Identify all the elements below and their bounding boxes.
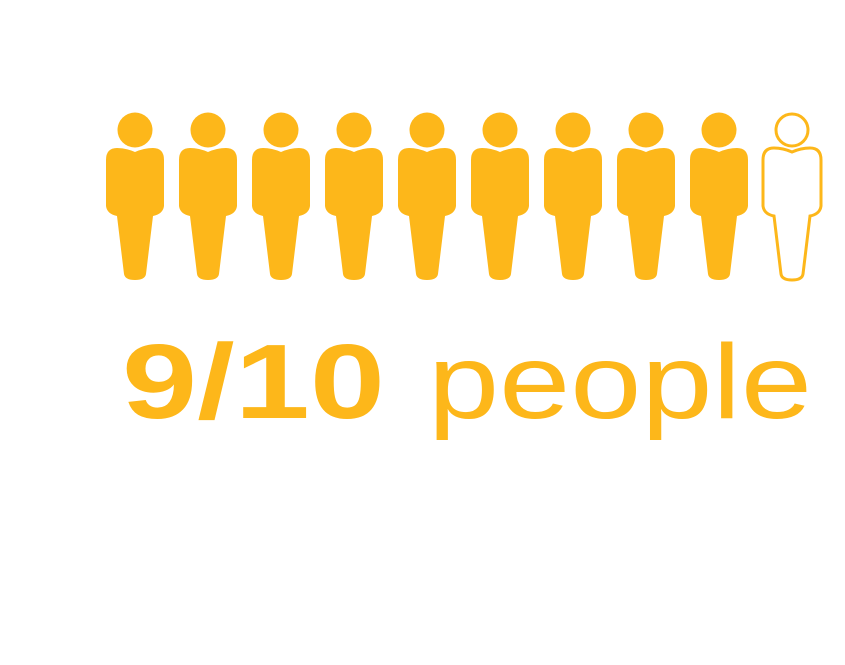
icon: person 2 — [179, 112, 237, 280]
icon: person 1 — [106, 112, 164, 280]
icon: person 9 — [690, 112, 748, 280]
headline word: people: people — [428, 323, 812, 441]
icon: person 5 — [398, 112, 456, 280]
icon: person 10 outline — [763, 114, 821, 280]
icon: person 6 — [471, 112, 529, 280]
icon: person 7 — [544, 112, 602, 280]
icon: person 8 — [617, 112, 675, 280]
headline: 9/10: 9/10 — [122, 323, 385, 441]
pictogram row: 9 of 10 people — [106, 112, 821, 280]
icon: person 4 — [325, 112, 383, 280]
icon: person 3 — [252, 112, 310, 280]
